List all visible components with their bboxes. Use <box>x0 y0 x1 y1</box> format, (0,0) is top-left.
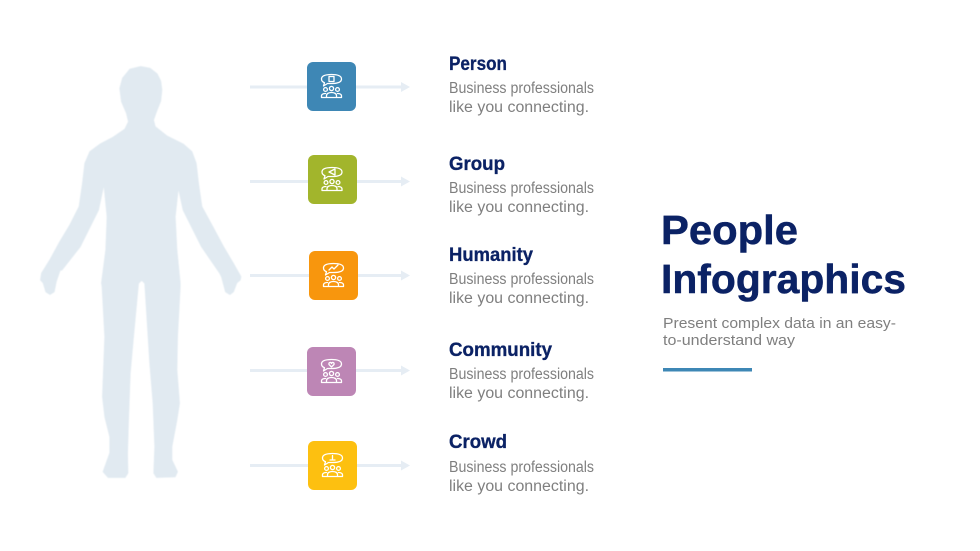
text block: humanity <box>449 245 594 307</box>
title: Infographics <box>661 256 906 302</box>
text block: person: Business professionals <box>449 80 594 97</box>
arrow: group <box>250 176 410 186</box>
text block: humanity: Humanity <box>449 245 533 266</box>
text block: crowd <box>449 432 594 495</box>
title <box>661 207 906 302</box>
title: People <box>661 207 798 253</box>
text block: community: like you connecting. <box>449 385 589 402</box>
icon: community <box>307 347 356 396</box>
text block: humanity: like you connecting. <box>449 290 589 307</box>
text block: crowd: Business professionals <box>449 459 594 476</box>
text block: community: Business professionals <box>449 366 594 383</box>
text block: crowd: Crowd <box>449 432 507 453</box>
icon: crowd <box>308 441 357 490</box>
text block: group: Group <box>449 154 505 175</box>
text block: community <box>449 340 594 402</box>
arrow: crowd <box>250 460 410 470</box>
text block: humanity: Business professionals <box>449 271 594 288</box>
text block: person: Person <box>449 54 507 75</box>
icon: person <box>307 62 356 111</box>
text block: person <box>449 54 594 116</box>
text block: group: like you connecting. <box>449 199 589 216</box>
subtitle: to-understand way <box>663 332 796 349</box>
human body silhouette <box>41 67 241 477</box>
arrow: community <box>250 366 410 376</box>
arrow: person <box>250 82 410 92</box>
accent bar <box>663 368 752 372</box>
icon: humanity <box>309 251 358 300</box>
subtitle: Present complex data in an easy- <box>663 315 896 332</box>
text block: group: Business professionals <box>449 180 594 197</box>
text block: group <box>449 154 594 216</box>
icon: group <box>308 155 357 204</box>
arrow: humanity <box>250 270 410 280</box>
text block: community: Community <box>449 340 552 361</box>
text block: person: like you connecting. <box>449 99 589 116</box>
subtitle <box>663 315 896 349</box>
text block: crowd: like you connecting. <box>449 478 589 495</box>
